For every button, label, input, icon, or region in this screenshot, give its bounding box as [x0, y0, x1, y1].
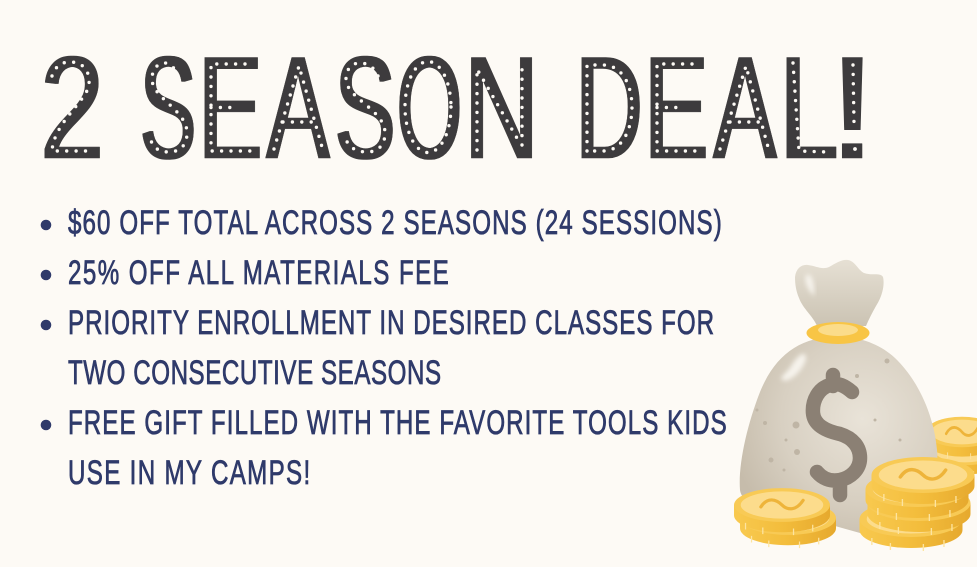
title [40, 25, 877, 190]
title marquee dots [52, 62, 857, 152]
back coin stack [926, 417, 977, 477]
right coin stack [860, 457, 974, 551]
left coin stack [734, 488, 836, 548]
title letters: O [397, 27, 462, 190]
money bag [740, 260, 937, 533]
title letters: A [714, 26, 776, 189]
bullet item 4: USE IN MY CAMPS! [68, 454, 310, 492]
speckles [756, 358, 902, 472]
bullet item 2: 25% OFF ALL MATERIALS FEE [68, 254, 449, 292]
title letters: S [140, 27, 196, 190]
bullet item 4 [41, 404, 727, 492]
title letters: D [576, 25, 643, 189]
bullet item 3: PRIORITY ENROLLMENT IN DESIRED CLASSES FOR [68, 304, 714, 342]
title letters: N [464, 26, 539, 189]
title letters: E [198, 27, 262, 190]
bullet item 3 [41, 304, 714, 392]
title letters: S [335, 26, 395, 189]
title letters: 2 [40, 25, 104, 189]
bullet item 1: $60 OFF TOTAL ACROSS 2 SEASONS (24 SESSIONS) [68, 204, 722, 242]
title letters: L [780, 26, 838, 189]
title letters [40, 25, 877, 190]
title letters: E [644, 27, 708, 190]
bullet list [41, 204, 727, 492]
title letters: A [267, 26, 329, 189]
title letters: ! [828, 27, 877, 190]
dollar sign [813, 375, 860, 495]
bullet item 4: FREE GIFT FILLED WITH THE FAVORITE TOOLS KIDS [68, 404, 727, 442]
bullet item 3: TWO CONSECUTIVE SEASONS [68, 354, 441, 392]
icon: money bag with coins [734, 260, 977, 551]
band [806, 322, 870, 344]
